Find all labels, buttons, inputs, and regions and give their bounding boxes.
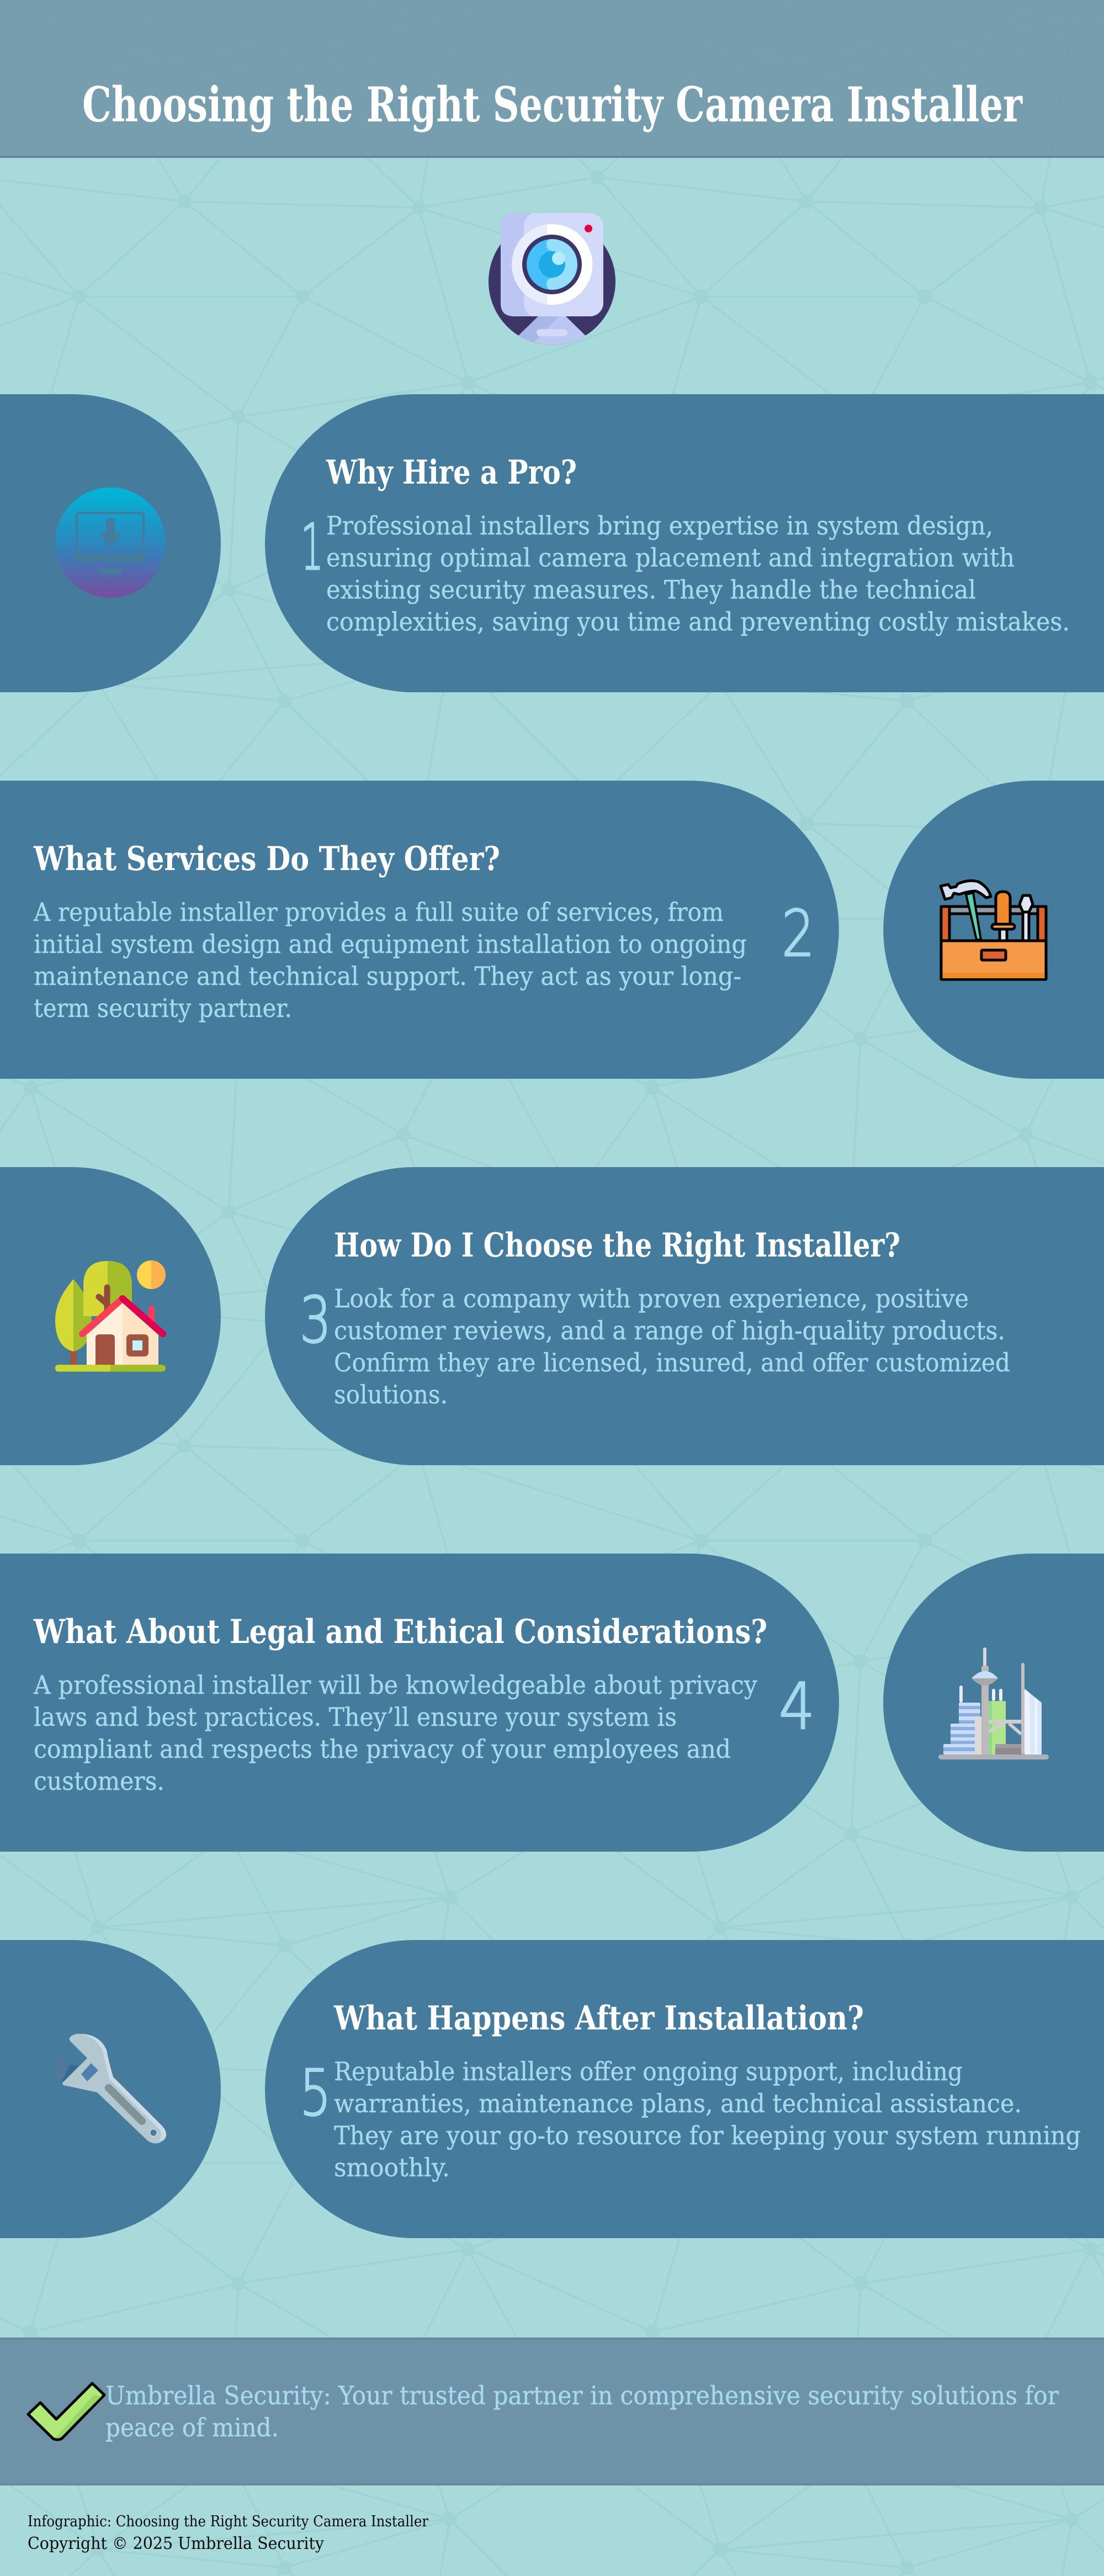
body text: Professional installers bring expertise in system design, <box>326 511 993 540</box>
step number 4: 4 <box>779 1670 815 1744</box>
body text: Look for a company with proven experience, positive <box>334 1284 969 1313</box>
body text: A professional installer will be knowledgeable about privacy <box>33 1670 757 1700</box>
panel: step 1 icon side <box>0 394 221 692</box>
body text: Confirm they are licensed, insured, and offer customized <box>334 1348 1010 1377</box>
icon: check mark <box>28 2383 104 2440</box>
heading: What Services Do They Offer? <box>33 840 500 878</box>
header: title bar <box>0 0 1104 158</box>
body text: term security partner. <box>34 993 292 1023</box>
icon: monitor download <box>55 487 166 598</box>
panel: step 2 icon side <box>883 781 1104 1079</box>
icon: toolbox <box>941 881 1046 979</box>
heading: How Do I Choose the Right Installer? <box>334 1226 900 1265</box>
footer credits: Infographic: Choosing the Right Security Camera Installer <box>28 2513 428 2530</box>
icon: security camera <box>489 213 615 353</box>
icon: city skyline <box>938 1647 1049 1759</box>
body text: solutions. <box>334 1380 448 1409</box>
heading: What Happens After Installation? <box>333 1999 864 2038</box>
step number 3: 3 <box>300 1284 331 1358</box>
panel: step 3 icon side <box>0 1167 221 1465</box>
step number 2: 2 <box>782 897 815 971</box>
footer credits <box>28 2513 428 2553</box>
body text: maintenance and technical support. They act as your long- <box>34 961 741 991</box>
panel: step 4 legal and ethical <box>0 1554 839 1852</box>
body text: laws and best practices. They’ll ensure your system is <box>34 1702 677 1732</box>
heading: What About Legal and Ethical Considerations? <box>33 1613 767 1651</box>
body text <box>33 897 747 1023</box>
icon: wrench <box>55 2034 166 2144</box>
body text: compliant and respects the privacy of your employees and <box>34 1734 731 1764</box>
panel: step 5 icon side <box>0 1940 221 2238</box>
body text: warranties, maintenance plans, and technical assistance. <box>334 2089 1022 2118</box>
body text: ensuring optimal camera placement and integration with <box>326 543 1015 573</box>
body text: existing security measures. They handle the technical <box>326 575 976 605</box>
panel: step 2 what services <box>0 781 839 1079</box>
body text: initial system design and equipment installation to ongoing <box>34 929 747 959</box>
body text: A reputable installer provides a full suite of services, from <box>33 897 724 927</box>
body text: complexities, saving you time and preventing costly mistakes. <box>326 607 1070 637</box>
body text <box>33 1670 757 1796</box>
body text <box>334 2056 1081 2182</box>
body text: customer reviews, and a range of high-quality products. <box>334 1316 1005 1345</box>
step number 5: 5 <box>300 2056 331 2130</box>
icon: house with trees <box>55 1260 166 1371</box>
body text: smoothly. <box>334 2153 450 2182</box>
body text: Reputable installers offer ongoing support, including <box>334 2056 963 2086</box>
body text <box>326 511 1070 637</box>
heading: Why Hire a Pro? <box>326 453 577 492</box>
panel: step 3 choosing an installer <box>265 1167 1104 1465</box>
panel: closing banner <box>0 2338 1104 2485</box>
banner text: peace of mind. <box>105 2413 279 2442</box>
body text <box>334 1284 1010 1409</box>
panel: step 5 after installation <box>265 1940 1104 2238</box>
panel: step 4 icon side <box>883 1554 1104 1852</box>
footer credits: Copyright © 2025 Umbrella Security <box>28 2534 324 2553</box>
body text: customers. <box>34 1766 164 1796</box>
panel: step 1 why hire a pro <box>265 394 1104 692</box>
banner text <box>105 2381 1059 2442</box>
step number 1: 1 <box>301 511 323 585</box>
